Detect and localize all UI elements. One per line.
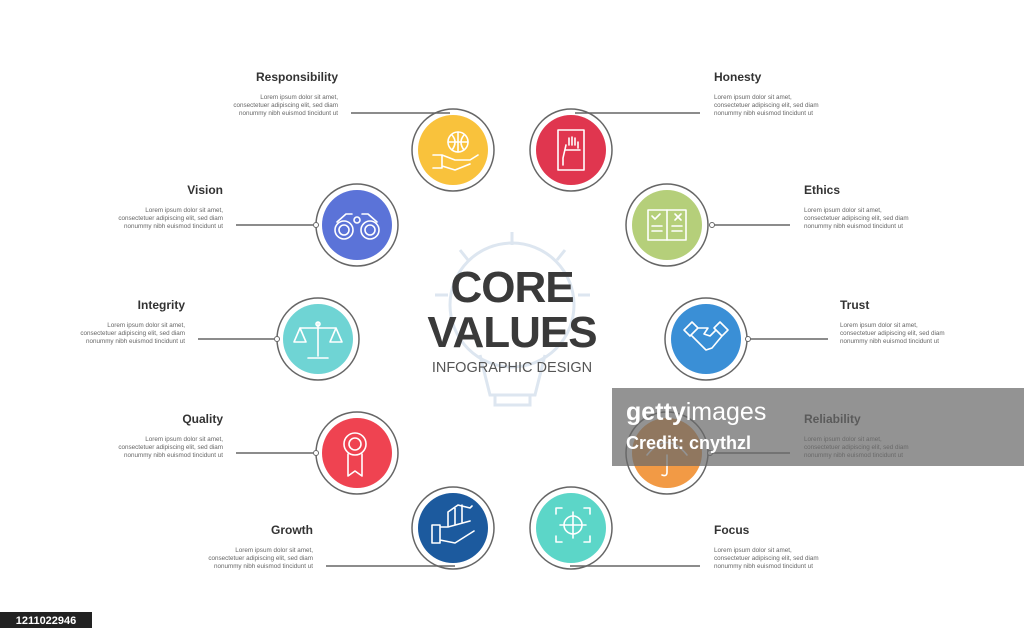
text: Honesty: nonummy nibh euismod tincidunt ut xyxy=(714,110,813,117)
text: Trust: Trust xyxy=(840,298,869,312)
text: Quality: consectetuer adipiscing elit, sed diam xyxy=(118,444,223,451)
text: Trust xyxy=(840,298,945,345)
title: CORE xyxy=(450,263,574,312)
text: Honesty: Honesty xyxy=(714,70,762,84)
icon: lightbulb background xyxy=(435,232,590,405)
text: Honesty xyxy=(714,70,819,117)
text: Ethics: nonummy nibh euismod tincidunt ut xyxy=(804,223,903,230)
text: Growth: consectetuer adipiscing elit, sed diam xyxy=(208,555,313,562)
text: Quality: Quality xyxy=(182,412,223,426)
text: Reliability: nonummy nibh euismod tincidunt ut xyxy=(804,452,903,459)
title xyxy=(427,263,597,376)
title: VALUES xyxy=(427,308,597,357)
node: Quality xyxy=(314,412,398,494)
text: Focus: Focus xyxy=(714,523,750,537)
node: Responsibility xyxy=(412,109,494,191)
text: Integrity: Lorem ipsum dolor sit amet, xyxy=(107,322,185,329)
title: INFOGRAPHIC DESIGN xyxy=(432,360,592,376)
text: Growth: Growth xyxy=(271,523,313,537)
text: Responsibility: Responsibility xyxy=(256,70,338,84)
text: Quality: nonummy nibh euismod tincidunt ut xyxy=(124,452,223,459)
node: Trust xyxy=(665,298,750,380)
text: Responsibility: consectetuer adipiscing elit, sed diam xyxy=(233,102,338,109)
node: Honesty xyxy=(530,109,612,191)
text: Trust: consectetuer adipiscing elit, sed diam xyxy=(840,330,945,337)
node: Focus xyxy=(530,487,612,569)
text: Trust: nonummy nibh euismod tincidunt ut xyxy=(840,338,939,345)
text: Reliability xyxy=(804,412,909,459)
text: Integrity: nonummy nibh euismod tincidunt ut xyxy=(86,338,185,345)
text: Quality: Lorem ipsum dolor sit amet, xyxy=(145,436,223,443)
text: Focus: nonummy nibh euismod tincidunt ut xyxy=(714,563,813,570)
text: Reliability: Reliability xyxy=(804,412,861,426)
text: Quality xyxy=(118,412,223,459)
text: Trust: Lorem ipsum dolor sit amet, xyxy=(840,322,918,329)
text: Growth: nonummy nibh euismod tincidunt ut xyxy=(214,563,313,570)
text: Integrity: consectetuer adipiscing elit, sed diam xyxy=(80,330,185,337)
text: Ethics: Ethics xyxy=(804,183,840,197)
text: Vision: Vision xyxy=(187,183,223,197)
text: Vision: Lorem ipsum dolor sit amet, xyxy=(145,207,223,214)
watermark: Credit: cnythzl xyxy=(626,433,751,453)
node: Vision xyxy=(314,184,398,266)
text: Integrity xyxy=(80,298,185,345)
text: Growth: Lorem ipsum dolor sit amet, xyxy=(235,547,313,554)
text: Focus: consectetuer adipiscing elit, sed diam xyxy=(714,555,819,562)
node: Ethics xyxy=(626,184,714,266)
text: Ethics: consectetuer adipiscing elit, sed diam xyxy=(804,215,909,222)
text: Integrity: Integrity xyxy=(138,298,185,312)
text: Ethics: Lorem ipsum dolor sit amet, xyxy=(804,207,882,214)
text: Vision: consectetuer adipiscing elit, sed diam xyxy=(118,215,223,222)
node: Growth xyxy=(412,487,494,569)
text: Honesty: Lorem ipsum dolor sit amet, xyxy=(714,94,792,101)
text: Vision xyxy=(118,183,223,230)
connector lines xyxy=(198,113,828,566)
image id label xyxy=(0,612,92,628)
node: Reliability xyxy=(626,412,712,494)
text: Focus: Lorem ipsum dolor sit amet, xyxy=(714,547,792,554)
watermark: gettyimages xyxy=(626,398,766,426)
text: Ethics xyxy=(804,183,909,230)
text: Responsibility xyxy=(233,70,338,117)
node: Integrity xyxy=(274,298,359,380)
text: Vision: nonummy nibh euismod tincidunt ut xyxy=(124,223,223,230)
text: Growth xyxy=(208,523,313,570)
text: Honesty: consectetuer adipiscing elit, sed diam xyxy=(714,102,819,109)
text: Responsibility: nonummy nibh euismod tincidunt ut xyxy=(239,110,338,117)
text: Reliability: Lorem ipsum dolor sit amet, xyxy=(804,436,882,443)
text: Focus xyxy=(714,523,819,570)
text: Reliability: consectetuer adipiscing elit, sed diam xyxy=(804,444,909,451)
watermark xyxy=(612,388,1024,466)
image id label: 1211022946 xyxy=(16,615,76,627)
text: Responsibility: Lorem ipsum dolor sit amet, xyxy=(260,94,338,101)
